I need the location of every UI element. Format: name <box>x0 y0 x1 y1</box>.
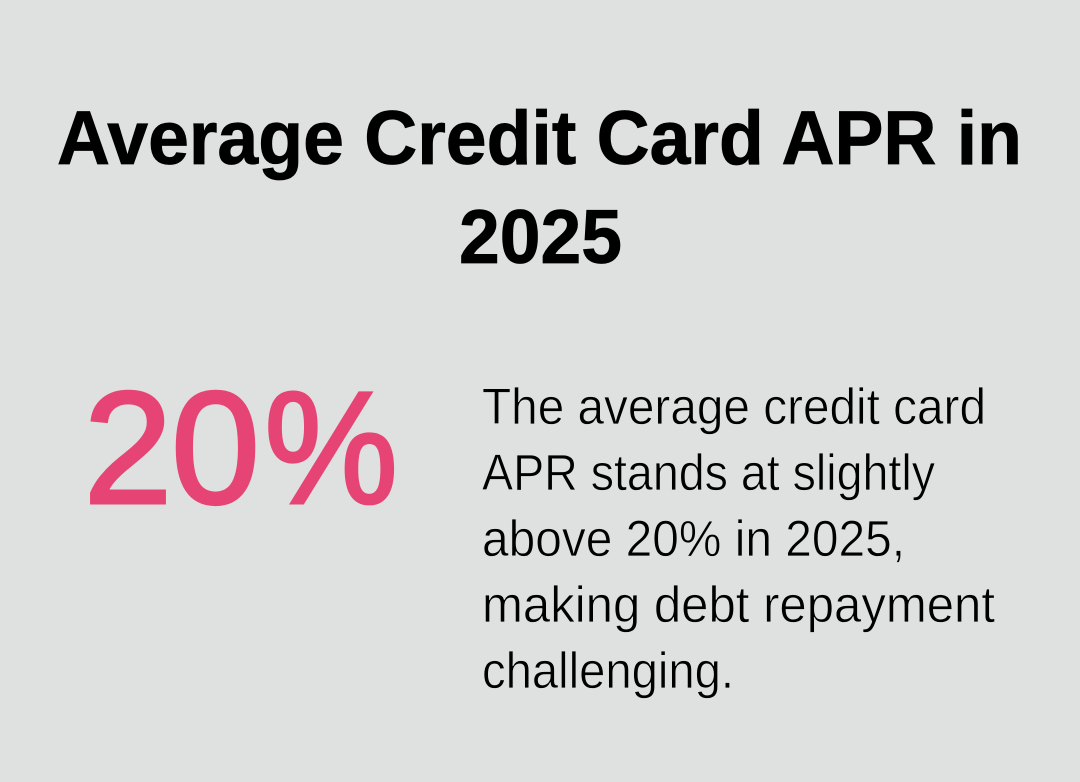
big stat: 20% <box>84 358 398 537</box>
description text: challenging. <box>482 642 734 699</box>
description text: APR stands at slightly <box>482 444 935 501</box>
description text: making debt repayment <box>482 576 995 633</box>
big stat: 20%: 20 <box>84 358 260 537</box>
title: Average Credit Card APR in <box>57 96 1022 181</box>
description text: above 20% in 2025, <box>482 510 905 567</box>
description text: The average credit card <box>482 378 986 435</box>
big stat: 20%: % <box>264 358 398 537</box>
title: 2025 <box>459 195 622 280</box>
description text <box>482 378 995 699</box>
title <box>57 96 1022 280</box>
